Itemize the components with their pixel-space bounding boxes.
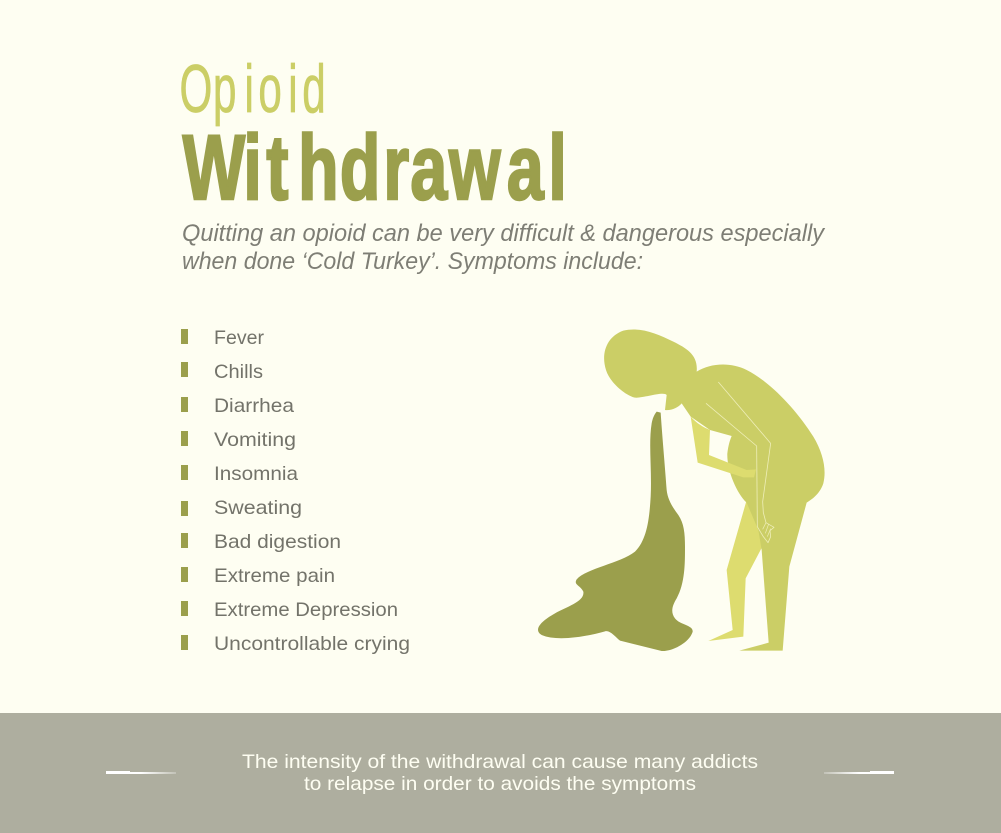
title	[180, 51, 567, 219]
intro text	[182, 220, 826, 275]
symptoms list: Diarrhea	[214, 395, 294, 417]
intro text: when done ‘Cold Turkey’. Symptoms include:	[182, 248, 643, 275]
symptoms list: Vomiting	[214, 429, 296, 451]
symptoms list: Sweating	[214, 497, 302, 519]
symptoms list: Bad digestion	[214, 531, 341, 553]
right decorative dash	[824, 771, 894, 774]
footer message: The intensity of the withdrawal can cause many addicts	[242, 751, 758, 773]
footer message	[242, 751, 758, 795]
symptoms list	[181, 327, 410, 655]
front arm outline	[706, 382, 774, 543]
symptoms list: Extreme pain	[214, 565, 335, 587]
title line: Withdrawal: Withdrawal	[183, 115, 567, 219]
intro text: Quitting an opioid can be very difficult & dangerous especially	[182, 220, 826, 247]
symptoms list: Insomnia	[214, 463, 298, 485]
back arm	[691, 417, 756, 477]
title line: Opioid: Opioid	[180, 51, 326, 126]
symptoms list: Chills	[214, 361, 263, 383]
back leg	[708, 500, 763, 641]
footer band	[0, 713, 1001, 833]
symptoms list: Fever	[214, 327, 264, 349]
illustration: person vomiting	[538, 329, 825, 651]
symptoms list: Extreme Depression	[214, 599, 398, 621]
footer message: to relapse in order to avoids the symptoms	[304, 773, 696, 795]
bullet markers	[181, 329, 188, 650]
symptoms list: Uncontrollable crying	[214, 633, 410, 655]
left decorative dash	[106, 771, 176, 774]
vomit puddle	[538, 412, 693, 651]
body and head silhouette	[604, 329, 825, 651]
hand fingers	[763, 523, 771, 537]
